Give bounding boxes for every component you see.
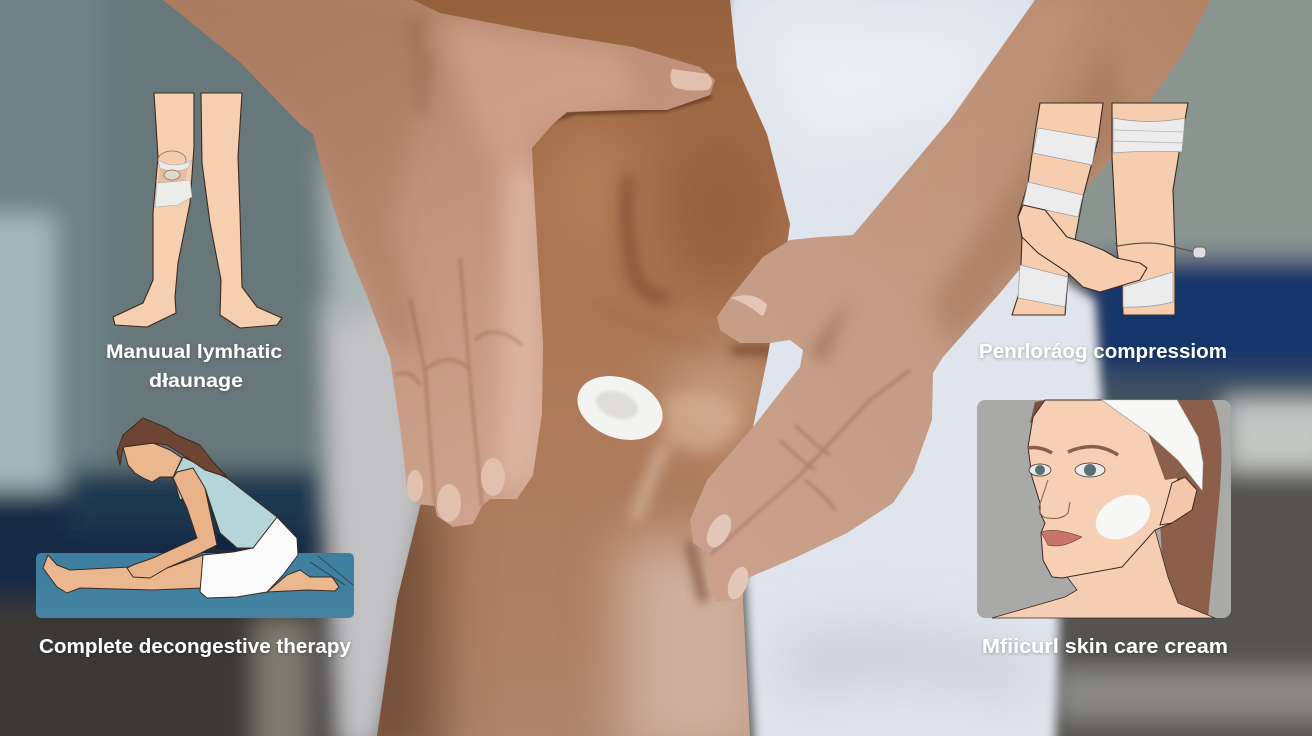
compression probe (1115, 243, 1195, 252)
label: complete decongestive therapy: Complete decongestive therapy (39, 636, 352, 658)
photo: left hand (163, 0, 715, 527)
right hand fingernails (702, 295, 767, 602)
ear (1160, 477, 1197, 525)
illustrated right leg (201, 93, 282, 328)
right hand knuckle creases (710, 370, 910, 555)
mat (36, 553, 354, 618)
cream on cheek (1088, 486, 1158, 548)
forearm and hand (1018, 205, 1147, 292)
top (173, 457, 277, 548)
left limb (1012, 103, 1103, 315)
label: manual lymphatic drainage (106, 341, 282, 392)
motion lines (310, 556, 353, 585)
face (1028, 400, 1178, 578)
headband (1102, 400, 1203, 490)
knee crease shadows (614, 172, 672, 308)
head and neck (123, 443, 182, 482)
far foot (267, 570, 339, 592)
hair (1045, 400, 1221, 618)
right limb (1112, 103, 1188, 315)
illustration: legs, manual lymphatic drainage (113, 93, 282, 328)
neck (992, 530, 1215, 618)
photo: leg (340, 0, 790, 736)
photo: right arm and hand (690, 0, 1210, 602)
eyebrows (1028, 447, 1118, 455)
eyes (1029, 464, 1051, 476)
illustrated left leg with bandage (113, 93, 194, 327)
nose (1039, 480, 1070, 518)
label: manual lymphatic drainage: dłaunage (149, 370, 243, 392)
illustration: complete decongestive therapy (36, 418, 354, 618)
outstretched leg (43, 555, 203, 593)
grey panel (977, 400, 1231, 618)
dark cushion (214, 533, 238, 552)
hair under headband (1148, 433, 1178, 480)
arm (127, 468, 217, 578)
label: manual lymphatic drainage: Manuual lymhatic (106, 341, 282, 363)
left hand finger creases (395, 258, 522, 506)
skirt (200, 517, 298, 598)
white coat (318, 0, 1102, 736)
photo: cream blob on knee (568, 365, 740, 520)
lips (1041, 530, 1082, 546)
label: performing compression: Penrloráog compressiom (979, 341, 1227, 363)
illustration: skin care cream on face (977, 400, 1231, 618)
label: skin care cream: Mfiicurl skin care cream (982, 636, 1228, 658)
left hand fingernails (407, 69, 712, 522)
illustration: performing compression (1012, 103, 1206, 315)
hair (117, 418, 227, 477)
